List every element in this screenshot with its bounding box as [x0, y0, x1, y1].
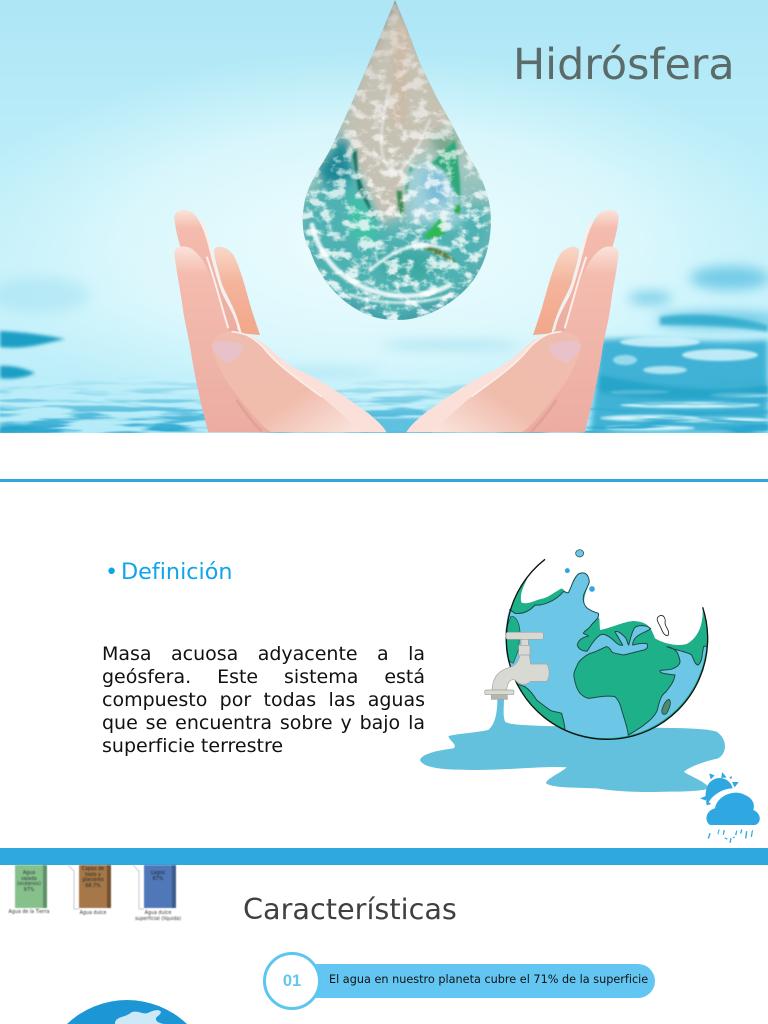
glow	[0, 50, 768, 430]
left hand	[174, 210, 387, 432]
globe drop	[295, 0, 500, 325]
indian ocean	[627, 645, 706, 736]
sky background	[0, 0, 768, 433]
definition text: Masa acuosa adyacente a la geósfera. Este sistema está compuesto por todas las aguas que se encuentra sobre y bajo la superficie terrestre	[102, 643, 425, 757]
light continent	[115, 1010, 165, 1024]
puddle	[420, 699, 725, 792]
atlantic ocean	[505, 572, 652, 738]
section band	[0, 848, 768, 865]
right water block	[590, 339, 768, 433]
label: agua dulce superficial: Agua dulce superficial (líquida)	[135, 911, 181, 922]
item text: El agua en nuestro planeta cubre el 71% de la superficie	[329, 973, 648, 986]
weather icon: sun, cloud and rain	[700, 772, 760, 843]
item 01	[263, 952, 655, 1010]
bar: lagos: 87%	[153, 876, 163, 882]
bottom globe icon	[67, 1000, 187, 1024]
water ripples	[0, 266, 768, 433]
number circle	[263, 952, 321, 1010]
bar: agua salada	[15, 865, 47, 908]
label: agua dulce: Agua dulce	[80, 911, 106, 916]
right hand	[406, 210, 619, 432]
heading: definition: Definición	[121, 559, 232, 585]
water droplets	[565, 550, 595, 592]
illustration: earth with faucet and puddle	[420, 549, 760, 843]
ice island	[657, 615, 669, 636]
divider line	[0, 479, 768, 482]
heading: definition: •	[105, 559, 118, 585]
heading: características: Características	[243, 892, 457, 926]
bar: lagos	[144, 865, 176, 908]
land	[506, 559, 708, 739]
faucet	[485, 632, 549, 699]
water distribution chart	[8, 864, 182, 922]
number circle: 01	[283, 972, 301, 990]
globe outline	[506, 559, 708, 739]
title: Hidrósfera	[513, 40, 735, 90]
bar: hielo: Capas de hielo y glaciares 68.7%	[82, 867, 104, 888]
globe	[505, 558, 708, 740]
connector lines	[68, 864, 144, 910]
madagascar	[662, 699, 670, 714]
bar: hielo	[79, 865, 111, 908]
hero panel: drop of water globe over hands	[0, 0, 768, 433]
bar: agua salada: Agua salada (océanos) 97%	[17, 871, 41, 892]
pill	[313, 964, 655, 998]
central america	[506, 616, 520, 663]
label: agua de la tierra: Agua de la Tierra	[8, 910, 50, 915]
bar: lagos: Lagos	[151, 871, 165, 876]
